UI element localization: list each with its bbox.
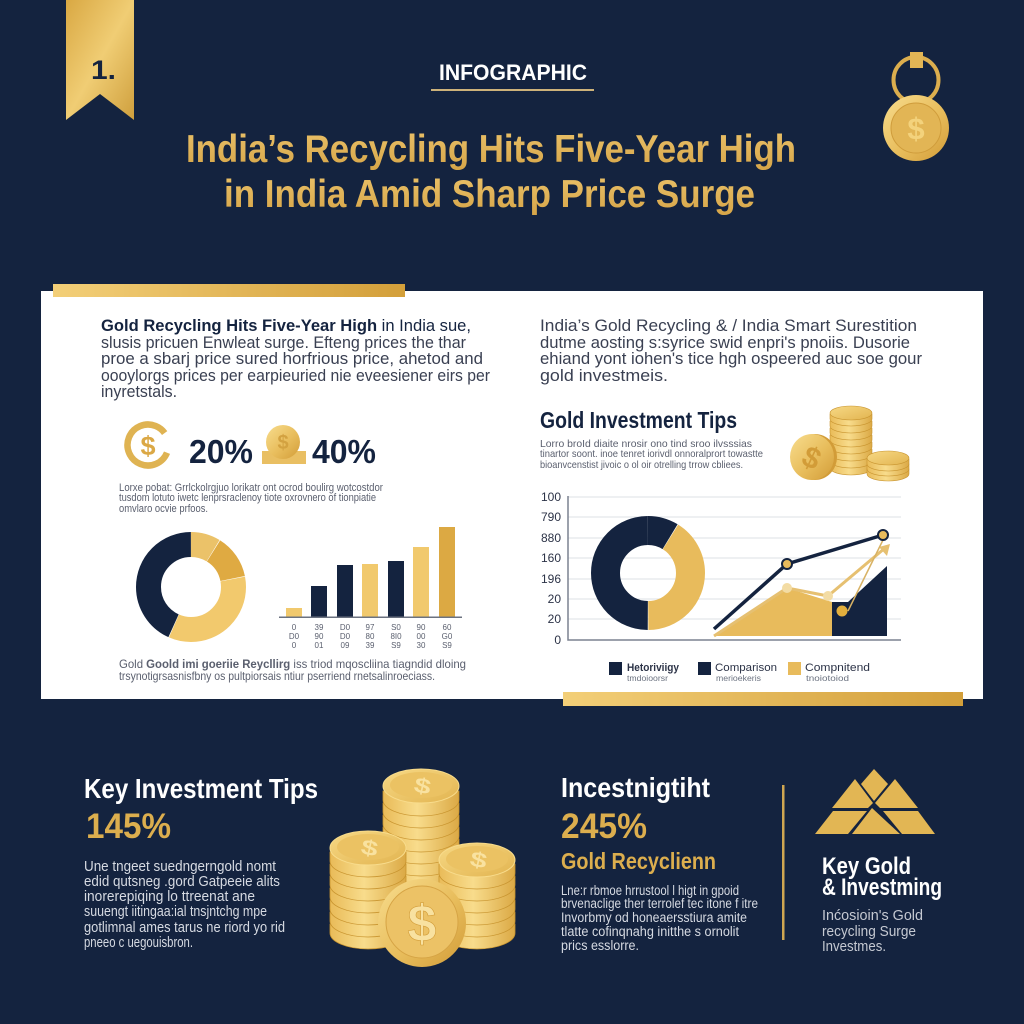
section: key investment tips: Une tngeet suedngerngold nomt: [84, 859, 276, 875]
line and donut chart: right: 790: [541, 510, 561, 524]
bar chart: 01: [315, 641, 324, 650]
section: key gold and investing: Key Gold: [822, 853, 911, 880]
text block: tips body: tinartor soont. inoe tenret iorivdl onnoralprort towastte: [540, 448, 763, 460]
bar chart: S9: [391, 641, 401, 650]
text block: left intro: slusis pricuen Enwleat surge. Efteng prices the thar: [101, 334, 466, 352]
title: in India Amid Sharp Price Surge: [224, 173, 755, 216]
section: insight 245%: Incestnigtiht: [561, 772, 710, 803]
line and donut chart: right: 20: [548, 592, 561, 606]
title: [186, 128, 796, 216]
text block: right intro: gold investmeis.: [540, 366, 668, 385]
chart legend: merioekeris: [716, 673, 761, 683]
chart legend: Hetoriviigy: [627, 662, 680, 674]
ribbon badge: 1.: [91, 55, 116, 85]
section: key gold and investing: Investmes.: [822, 938, 886, 955]
text block: stat caption: tusdom lotuto iwetc lenprsraclenoy tiote oxrovnero of tionpiatie: [119, 492, 376, 504]
title: India’s Recycling Hits Five-Year High: [186, 128, 796, 171]
icon: gold pyramid: [815, 769, 935, 834]
bar chart: D0: [340, 632, 351, 641]
section: key investment tips: gotlimnal ames tarus ne riord yo rid: [84, 920, 285, 936]
bar chart: S9: [442, 641, 452, 650]
bar chart: G0: [442, 632, 453, 641]
panel: main white card: [41, 284, 983, 706]
section: insight 245%: prics esslorre.: [561, 938, 639, 953]
text block: left intro: proe a sbarj price sured horfrious price, ahetod and: [101, 350, 483, 368]
text block: right intro: ehiand yont iohen's tice hgh ospeered auc soe gour: [540, 349, 922, 368]
text block: chart caption: [119, 657, 466, 683]
text block: stat caption: Lorxe pobat: Grrlckolrgjuo lorikatr ont ocrod boulirg wotcostdor: [119, 482, 383, 494]
section: insight 245%: tlatte cofinqnahg initthe s ornolit: [561, 924, 739, 939]
line and donut chart: right: [541, 490, 901, 647]
section: key investment tips: [84, 773, 318, 951]
stat: 20% with ring icon: [121, 418, 253, 472]
donut chart: left: [148, 544, 234, 630]
bar chart: [279, 527, 462, 650]
bar chart: S0: [391, 623, 401, 632]
line and donut chart: right: 196: [541, 572, 561, 586]
section: insight 245%: Lne:r rbmoe hrrustool l higt in gpoid: [561, 883, 739, 898]
text block: tips body: bioanvcenstist jivoic o ol oir otrelling trrow cbliees.: [540, 459, 743, 471]
text block: stat caption: [119, 482, 383, 515]
text block: stat caption: omvlaro ocvie prfoos.: [119, 503, 208, 515]
text block: left intro: oooylorgs prices per earpieuried nie eveesiener eirs per: [101, 367, 490, 385]
stat: 20% with ring icon: 20%: [189, 433, 253, 470]
chart legend: Comparison: [715, 662, 777, 674]
icon: large gold coin stacks: $: [359, 834, 381, 862]
bar chart: 09: [341, 641, 350, 650]
bar chart: 39: [315, 623, 324, 632]
section: key gold and investing: [822, 853, 942, 955]
icon: gold coin pendant: [883, 52, 949, 161]
section: key investment tips: inorerepiqing lo ttreenat ane: [84, 889, 255, 905]
bar chart: 0: [292, 641, 297, 650]
text block: left intro: [101, 317, 490, 401]
line and donut chart: right: 20: [548, 612, 561, 626]
section: insight 245%: Invorbmy od honeaersstiura amite: [561, 910, 747, 925]
section: key investment tips: edid qutsneg .gord Gatpeeie alits: [84, 874, 280, 890]
bar chart: 00: [417, 632, 426, 641]
chart legend: Compnitend: [805, 662, 870, 674]
line and donut chart: right: 0: [554, 633, 561, 647]
section: key investment tips: Key Investment Tips: [84, 773, 318, 804]
text block: right intro: dutme aosting s:syrice swid enpri's pnoiis. Dusorie: [540, 333, 910, 352]
bar chart: 30: [417, 641, 426, 650]
icon: large gold coin stacks: $: [468, 846, 490, 874]
ribbon badge: [66, 0, 134, 120]
line and donut chart: right: 880: [541, 531, 561, 545]
text block: left intro: inyretstals.: [101, 383, 177, 401]
bar chart: 60: [443, 623, 452, 632]
stat: 40% with coin icon: 40%: [312, 433, 376, 470]
chart legend: tnoiotoiod: [806, 673, 849, 683]
section: insight 245%: [561, 772, 758, 953]
bar chart: 97: [366, 623, 375, 632]
text block: right intro: [540, 316, 922, 385]
eyebrow label: INFOGRAPHIC: [439, 60, 587, 85]
chart legend: tmdoioorsr: [627, 673, 668, 683]
icon: large gold coin stacks: [330, 769, 515, 967]
text block: left intro: Gold Recycling Hits Five-Year High in India sue,: [101, 317, 471, 335]
stat: 20% with ring icon: $: [140, 431, 156, 461]
section: insight 245%: brvenaclige ther terrolef tec itone f itre: [561, 896, 758, 911]
section: key gold and investing: & Investming: [822, 874, 942, 901]
bar chart: D0: [289, 632, 300, 641]
bar chart: 8I0: [390, 632, 402, 641]
vertical divider: [782, 785, 784, 940]
section: key gold and investing: Inćosioin's Gold: [822, 907, 923, 924]
section: insight 245%: Gold Recyclienn: [561, 848, 716, 874]
text block: tips body: Lorro broId diaite nrosir ono tind sroo ilvsssias: [540, 438, 752, 450]
heading: gold investment tips: Gold Investment Tips: [540, 407, 737, 433]
text block: tips body: [540, 438, 763, 471]
line and donut chart: right: 100: [541, 490, 561, 504]
text block: chart caption: trsynotigrsasnisfbny os pultpiorsais ntiur pserriend rnetsalinroeciass.: [119, 669, 435, 683]
bar chart: 39: [366, 641, 375, 650]
section: key investment tips: pneeo c uegouisbron.: [84, 935, 193, 951]
icon: gold coin pendant: $: [907, 111, 925, 146]
text block: right intro: India’s Gold Recycling & / India Smart Surestition: [540, 316, 917, 335]
icon: large gold coin stacks: $: [408, 895, 437, 953]
bar chart: 0: [292, 623, 297, 632]
stat: 40% with coin icon: $: [277, 432, 289, 454]
bar chart: 90: [315, 632, 324, 641]
text block: chart caption: Gold Goold imi goeriie Reycllirg iss triod mqoscliina tiagndid dloing: [119, 657, 466, 671]
icon: large gold coin stacks: $: [412, 772, 434, 800]
icon: small coin stacks: [790, 406, 909, 481]
bar chart: 80: [366, 632, 375, 641]
bar chart: D0: [340, 623, 351, 632]
icon: small coin stacks: $: [797, 440, 826, 477]
bar chart: 90: [417, 623, 426, 632]
stat: 40% with coin icon: [262, 425, 376, 470]
line and donut chart: right: 160: [541, 551, 561, 565]
section: key gold and investing: recycling Surge: [822, 923, 916, 940]
section: insight 245%: 245%: [561, 807, 647, 846]
section: key investment tips: 145%: [86, 807, 171, 846]
section: key investment tips: suuengt iitingaa:ial tnsjntchg mpe: [84, 904, 267, 920]
chart legend: [609, 662, 870, 683]
